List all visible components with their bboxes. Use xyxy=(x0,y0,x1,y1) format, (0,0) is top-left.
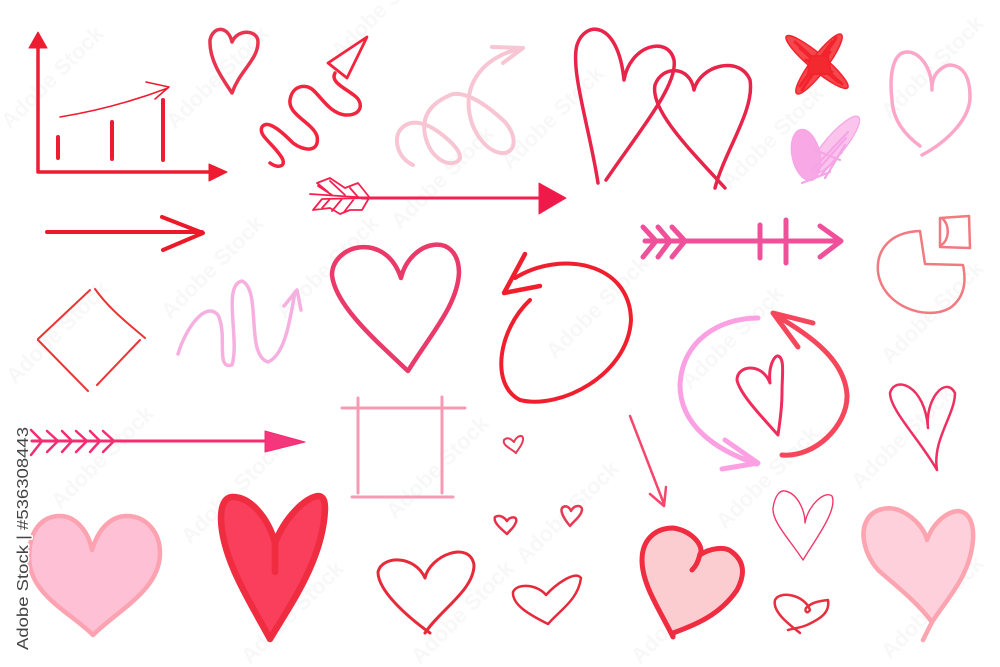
icon: scribbled x xyxy=(781,30,853,98)
watermark pattern: Adobe Stock xyxy=(846,380,959,494)
arrow: chevron feather arrow xyxy=(31,430,305,455)
icon: pie chart outline xyxy=(878,216,970,313)
watermark pattern: Adobe Stock xyxy=(46,400,159,514)
icon: diamond outline xyxy=(38,289,145,391)
watermark pattern: Adobe Stock xyxy=(406,555,519,667)
watermark pattern: Adobe Stock xyxy=(626,555,739,667)
arrow: red right arrow xyxy=(47,217,203,250)
icon: pale spiral arrow xyxy=(397,47,523,165)
icon: tiny heart 3 xyxy=(495,516,516,534)
watermark pattern: Adobe Stock xyxy=(876,10,989,124)
watermark pattern: Adobe Stock xyxy=(381,410,494,524)
icon: thin pink heart xyxy=(773,491,833,560)
icon: filled pale heart right xyxy=(863,508,973,640)
icon: tiny heart 1 xyxy=(504,436,523,453)
icon: wide thin heart bottom xyxy=(513,576,581,624)
icon: heart inner notch xyxy=(692,554,700,570)
icon: circular arrows with heart xyxy=(680,313,847,469)
icon: filled red heart xyxy=(221,496,325,639)
watermark pattern: Adobe Stock xyxy=(716,80,829,194)
watermark pattern: Adobe Stock xyxy=(176,435,289,549)
watermark pattern: Adobe Stock xyxy=(541,250,654,364)
icon: square frame xyxy=(342,397,465,497)
icon: small heart top xyxy=(210,29,258,93)
watermark pattern: Adobe Stock xyxy=(271,210,384,324)
stock number: Adobe Stock | #536308443 xyxy=(15,427,32,650)
icon: tiny heart bottom right xyxy=(775,595,828,633)
icon: outline red heart bottom xyxy=(378,552,474,633)
watermark pattern: Adobe Stock xyxy=(1,275,114,389)
icon: squiggle arrow xyxy=(261,37,367,166)
watermark pattern: Adobe Stock xyxy=(156,210,269,324)
icon: scribbled heart xyxy=(787,110,866,183)
watermark pattern: Adobe Stock xyxy=(386,120,499,234)
icon: slim outline heart right xyxy=(890,384,955,470)
watermark pattern: Adobe Stock xyxy=(161,20,274,134)
watermark pattern: Adobe Stock xyxy=(496,60,609,174)
icon: tiny heart 2 xyxy=(562,506,582,526)
icon: bar chart with axes xyxy=(29,32,227,181)
icon: filled pink heart left xyxy=(29,516,160,635)
icon: large outline heart centre xyxy=(332,245,459,371)
watermark pattern: Adobe Stock xyxy=(236,555,349,667)
watermark pattern: Adobe Stock xyxy=(711,420,824,534)
watermark pattern: Adobe Stock xyxy=(876,255,989,369)
watermark pattern: Adobe Stock xyxy=(876,550,989,664)
arrow: thin diagonal xyxy=(630,416,666,506)
arrow: magenta feathered arrow xyxy=(643,220,841,263)
icon: double hearts xyxy=(576,29,751,188)
watermark pattern: Adobe Stock xyxy=(676,280,789,394)
arrow: pink squiggle xyxy=(178,281,301,365)
watermark pattern: Adobe Stock xyxy=(511,455,624,569)
arrow: feather to triangle head xyxy=(310,178,566,214)
icon: outline pink heart top right xyxy=(891,52,970,155)
icon: filled heart with dark outline xyxy=(642,528,742,637)
arrow: circular red arrow xyxy=(501,254,631,402)
